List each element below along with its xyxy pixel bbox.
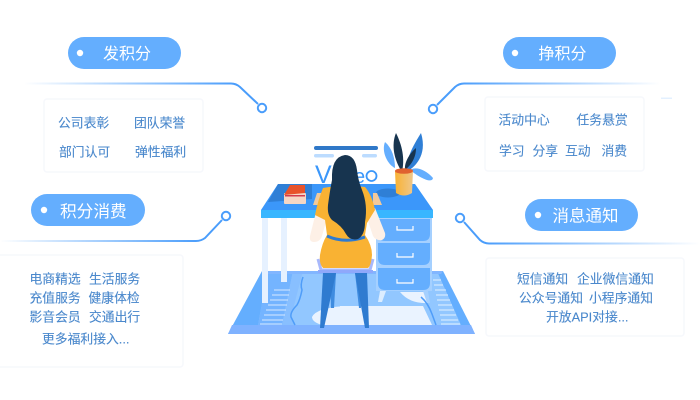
card: 发积分 items: 弹性福利: [135, 144, 186, 160]
illustration: woman at desk: [228, 133, 475, 334]
card: 发积分 items: 团队荣誉: [134, 116, 185, 130]
monitor: V: [315, 161, 332, 189]
heading pill: 发积分: 发积分: [103, 45, 151, 63]
card: 挣积分 items: 消费: [602, 144, 627, 158]
panel: 消息通知: [456, 199, 700, 336]
card: 挣积分 items: 互动: [565, 144, 591, 158]
heading pill: 消息通知: 消息通知: [552, 206, 618, 226]
heading pill: 消息通知: [525, 199, 638, 231]
heading pill: 积分消费: [31, 194, 145, 226]
heading pill: 积分消费: 积分消费: [60, 202, 127, 221]
connector line with node: [429, 84, 672, 113]
card: 消息通知 items: 短信通知: [517, 272, 568, 286]
card: 积分消费 items: [0, 255, 183, 367]
card: 挣积分 items: 分享: [532, 144, 558, 158]
card: 积分消费 items: 电商精选: [30, 272, 81, 286]
belt: [327, 236, 365, 240]
paper under arms: [313, 193, 322, 205]
woman: [310, 155, 385, 268]
card: 积分消费 items: 交通出行: [89, 310, 140, 324]
card: 积分消费 items: 健康体检: [88, 290, 140, 306]
dress: [315, 186, 375, 268]
desk: [261, 184, 433, 303]
connector line with node: [24, 84, 266, 112]
stool: [318, 259, 373, 328]
card: 挣积分 items: 学习: [499, 144, 525, 158]
card: 积分消费 items: 充值服务: [30, 290, 81, 306]
monitor: [314, 146, 378, 189]
card: 消息通知 items: 小程序通知: [589, 290, 653, 306]
hair: [328, 155, 366, 239]
connector line with node: [456, 214, 700, 244]
card: 发积分 items: 公司表彰: [58, 116, 109, 130]
card: 挣积分 items: [485, 97, 644, 171]
card: 发积分 items: [44, 99, 203, 172]
card: 积分消费 items: 生活服务: [89, 272, 140, 286]
books: [284, 185, 306, 204]
connector line with node: [0, 212, 230, 241]
card: 消息通知 items: 开放API对接...: [546, 310, 628, 324]
heading pill: 挣积分: [503, 37, 616, 69]
panel: 挣积分: [429, 37, 672, 171]
plant: [376, 133, 433, 198]
arms: [310, 212, 327, 242]
heading pill: 发积分: [68, 37, 181, 69]
card: 积分消费 items: 更多福利接入...: [42, 332, 129, 346]
card: 消息通知 items: 企业微信通知: [577, 272, 654, 286]
card: 消息通知 items: [486, 258, 684, 336]
panel: 发积分: [24, 37, 266, 172]
card: 挣积分 items: 任务悬赏: [576, 112, 628, 128]
heading pill: 挣积分: 挣积分: [538, 45, 587, 63]
monitor: e: [354, 166, 365, 188]
rug: [228, 271, 475, 334]
card: 消息通知 items: 公众号通知: [519, 290, 583, 306]
card: 发积分 items: 部门认可: [59, 144, 110, 160]
panel: 积分消费: [0, 194, 230, 367]
card: 积分消费 items: 影音会员: [30, 310, 81, 324]
card: 挣积分 items: 活动中心: [498, 112, 550, 128]
drawer cabinet: [376, 218, 432, 303]
